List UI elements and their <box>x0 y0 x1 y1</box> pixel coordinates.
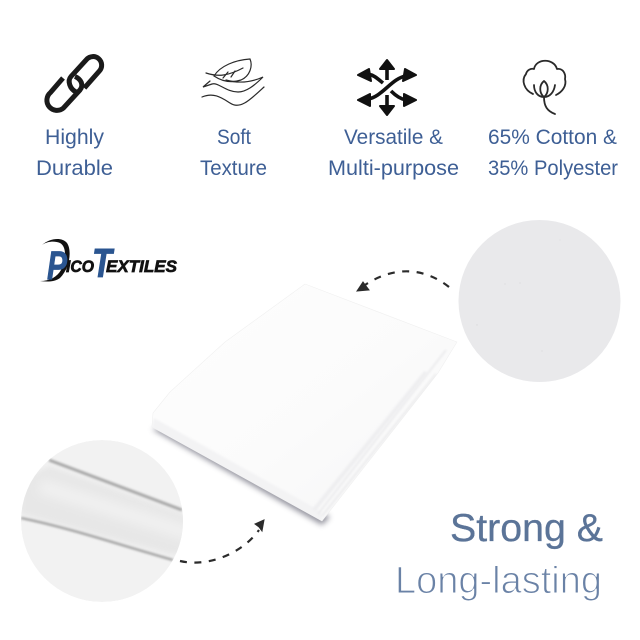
feature: fabric blend <box>488 61 618 180</box>
icon: chain link <box>47 57 102 110</box>
icon: feather over waves <box>202 59 264 105</box>
label: soft texture: Texture <box>200 157 267 180</box>
logo: PicoTextiles: ICO <box>66 257 94 276</box>
label: cotton and polyester: 65% Cotton & <box>488 126 617 149</box>
arrow: weave circle to sheet <box>357 271 449 291</box>
label: versatile and multi-purpose: Multi-purpose <box>328 157 459 180</box>
headline: strong and long-lasting: Strong & <box>450 507 603 550</box>
logo: PicoTextiles <box>40 239 178 288</box>
label: versatile and multi-purpose: Versatile & <box>344 126 443 149</box>
label: highly durable <box>36 126 113 180</box>
callout: fold close-up circle <box>20 440 190 602</box>
label: highly durable: Highly <box>45 126 105 149</box>
label: highly durable: Durable <box>36 157 113 180</box>
label: soft texture <box>200 126 267 180</box>
headline: strong and long-lasting <box>395 507 603 602</box>
label: versatile and multi-purpose <box>328 126 459 180</box>
callout: weave close-up circle <box>458 220 620 382</box>
feature: highly durable <box>36 57 113 180</box>
logo: PicoTextiles: T <box>92 240 114 286</box>
folded white sheet <box>152 284 457 525</box>
feature: versatile <box>328 60 459 180</box>
logo: PicoTextiles: P <box>47 244 67 288</box>
label: soft texture: Soft <box>217 126 251 149</box>
icon: cotton boll <box>524 61 565 114</box>
logo: PicoTextiles: EXTILES <box>106 257 178 276</box>
arrow: fold circle to sheet <box>180 520 264 563</box>
headline: strong and long-lasting: Long-lasting <box>395 560 602 602</box>
label: cotton and polyester <box>488 126 618 180</box>
feature: soft texture <box>200 59 267 180</box>
label: cotton and polyester: 35% Polyester <box>488 157 618 180</box>
icon: six crossing arrows <box>358 60 416 115</box>
